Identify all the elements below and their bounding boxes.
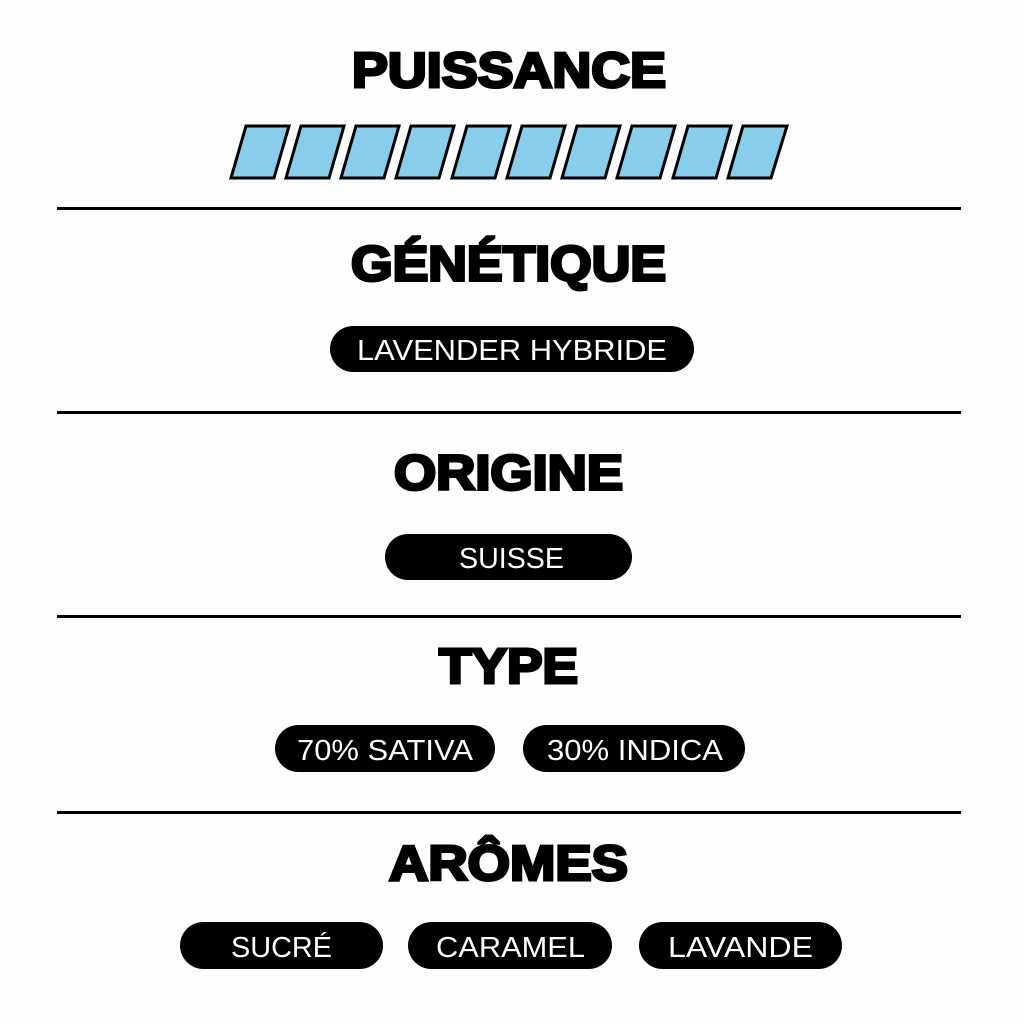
pill: lavender hybride: LAVENDER HYBRIDE bbox=[357, 335, 667, 367]
pill: 30% indica: 30% INDICA bbox=[547, 735, 724, 767]
section: puissance bbox=[231, 44, 787, 178]
heading: genetique: GÉNÉTIQUE bbox=[351, 238, 666, 292]
pill: 70% sativa bbox=[275, 725, 495, 772]
heading: origine: ORIGINE bbox=[394, 446, 623, 500]
pill: 70% sativa: 70% SATIVA bbox=[297, 735, 474, 767]
section: origine bbox=[385, 446, 632, 580]
pill: suisse bbox=[385, 534, 632, 580]
pill: sucre: SUCRÉ bbox=[231, 931, 332, 964]
section: aromes bbox=[180, 836, 842, 969]
pill: 30% indica bbox=[523, 725, 745, 772]
pill: lavande: LAVANDE bbox=[668, 932, 813, 964]
section: type bbox=[275, 640, 745, 772]
pill: lavande bbox=[639, 922, 842, 969]
power gauge: ten filled segments bbox=[231, 126, 787, 178]
heading: puissance: PUISSANCE bbox=[352, 44, 666, 98]
pill: caramel: CARAMEL bbox=[436, 932, 585, 964]
pill: suisse: SUISSE bbox=[459, 543, 564, 575]
heading: aromes: ARÔMES bbox=[389, 836, 628, 891]
section: genetique bbox=[330, 238, 694, 372]
heading: type: TYPE bbox=[439, 640, 578, 694]
pill: sucre bbox=[180, 922, 383, 969]
pill: lavender hybride bbox=[330, 326, 694, 372]
pill: caramel bbox=[408, 922, 612, 969]
